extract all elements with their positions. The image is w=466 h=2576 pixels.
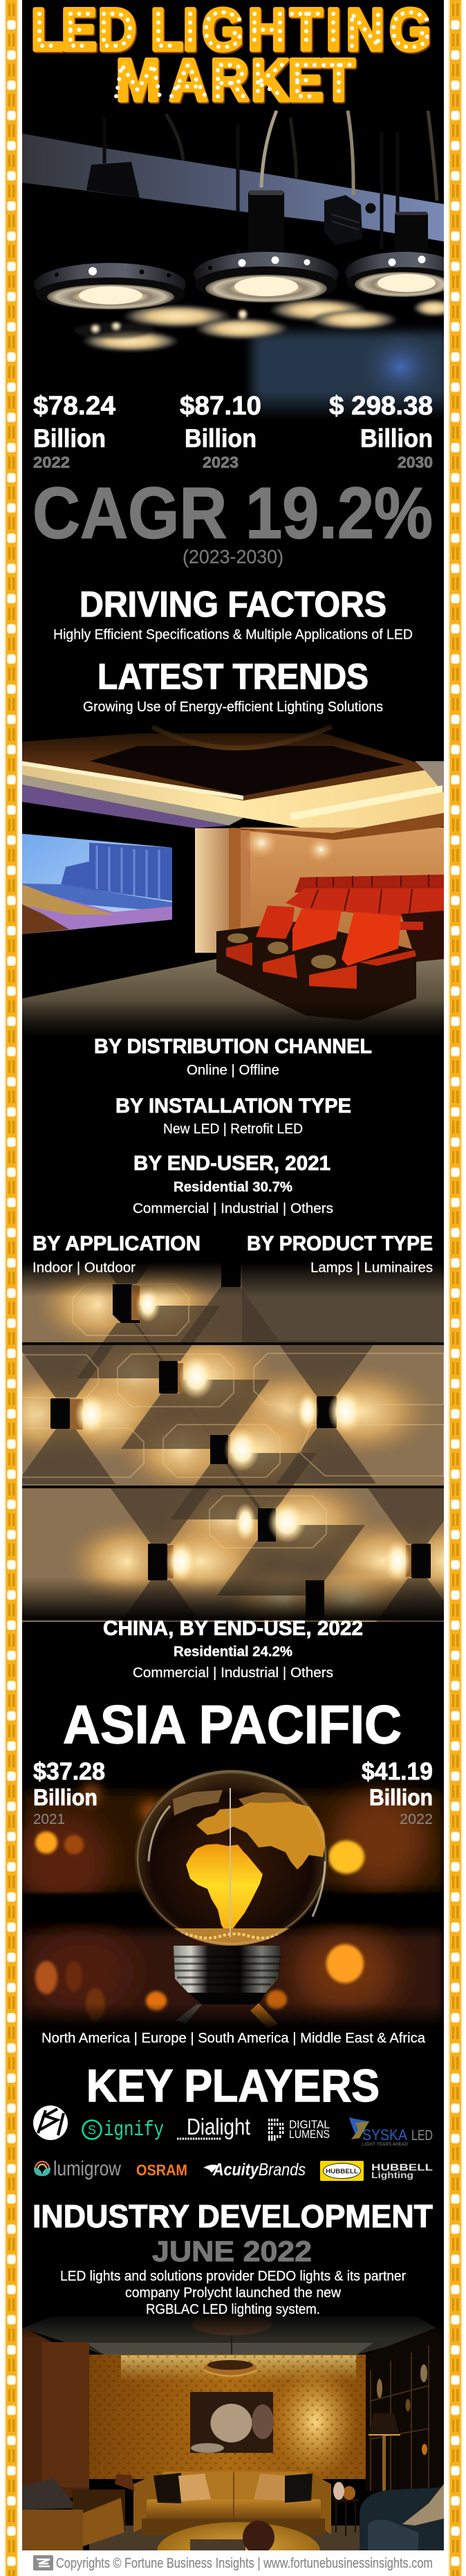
blurred blue background glow [252, 329, 449, 429]
development description [60, 2269, 406, 2317]
segment: by distribution channel [94, 1035, 372, 1078]
blurred background lamps [74, 299, 455, 351]
market value 2022: 2022 [33, 453, 70, 471]
logo: Hubbell Lighting wordmark [371, 2162, 434, 2180]
right shelves [366, 2325, 444, 2491]
photo: globe light bulb [14, 1746, 444, 2029]
lamp: centre [194, 252, 339, 302]
regional value 2022: $41.19 [362, 1758, 433, 1785]
regional value 2021: 2021 [33, 1811, 65, 1827]
development date: JUNE 2022 [152, 2235, 312, 2267]
development description: RGBLAC LED lighting system. [146, 2302, 320, 2317]
photo: LED pendant lamps [22, 111, 464, 433]
glass globe [135, 1770, 328, 1949]
market value 2022 [33, 392, 115, 471]
segment: by application: BY APPLICATION [32, 1232, 201, 1255]
development description: LED lights and solutions provider DEDO lights & its partner [60, 2269, 406, 2284]
segment: by end-user 2021: Commercial | Industrial | Others [133, 1201, 333, 1216]
logo: Syska LED: SYSKA [362, 2126, 407, 2144]
segment: China by end-use 2022: Residential 24.2% [174, 1645, 292, 1660]
heading: Asia Pacific: ASIA PACIFIC [63, 1694, 402, 1755]
wall lamp hoods [50, 1262, 431, 1618]
logo: Syska LED [349, 2117, 433, 2147]
black screen wall [22, 802, 178, 826]
lamp: left [34, 263, 186, 311]
key players logos [33, 2105, 434, 2181]
logo: Syska LED: LED [411, 2128, 433, 2144]
logo: Hubbell Lighting wordmark: HUBBELL [371, 2162, 434, 2173]
logo: Hubbell Lighting wordmark: Lighting [371, 2170, 413, 2180]
segment: China by end-use 2022: CHINA, BY END-USE, 2022 [103, 1617, 363, 1640]
logo: Digital Lumens: DIGITAL [289, 2119, 330, 2131]
logo: Signify: ignify [104, 2118, 164, 2142]
projection screen [22, 834, 172, 934]
floor lamp [369, 2413, 400, 2494]
photo: living room [22, 2314, 444, 2550]
panel grooves [22, 1342, 444, 1488]
marquee bulbs [39, 12, 427, 96]
regional value 2021 [33, 1758, 105, 1827]
market value 2022: Billion [33, 424, 106, 453]
logo: LSI ball [33, 2105, 68, 2140]
blue armchair [360, 2484, 444, 2550]
LED strip: right border [448, 0, 462, 2576]
regional value 2022 [362, 1758, 433, 1827]
market value 2023: $87.10 [180, 392, 261, 421]
segment: by end-user 2021 [133, 1152, 333, 1216]
LED strip: left border [4, 0, 18, 2576]
pillar [195, 828, 241, 956]
lamp: right [345, 252, 444, 298]
segment: by installation type: New LED | Retrofit LED [163, 1122, 303, 1137]
logo: lumigrow [34, 2157, 121, 2180]
segment: by installation type: BY INSTALLATION TYPE [115, 1095, 351, 1117]
heading: driving factors: DRIVING FACTORS [80, 585, 386, 625]
other regions list: North America | Europe | South America | Middle East & Africa [41, 2031, 426, 2046]
segment: by product type [247, 1232, 433, 1276]
segment: by product type: Lamps | Luminaires [310, 1261, 433, 1276]
heading: latest trends: LATEST TRENDS [97, 657, 369, 697]
logo: Acuity Brands: AcuityBrands [212, 2160, 306, 2180]
photo: wall lights [22, 1264, 444, 1622]
photo: home theater [22, 712, 444, 1046]
market value 2023: Billion [185, 424, 257, 453]
wall sconces [247, 829, 332, 860]
regional value 2022: 2022 [400, 1811, 433, 1827]
market value 2030 [329, 392, 433, 471]
heading: key players: KEY PLAYERS [86, 2060, 380, 2111]
floor [89, 2525, 360, 2550]
segment: by distribution channel: BY DISTRIBUTION CHANNEL [94, 1035, 372, 1058]
CAGR headline: CAGR 19.2% [32, 473, 433, 554]
title letters: MARKET [116, 48, 355, 113]
hood bronze sides [70, 1286, 411, 1578]
market value 2030: 2030 [398, 453, 433, 471]
shadow wedges [22, 1267, 444, 1622]
heading: industry development: INDUSTRY DEVELOPMENT [32, 2198, 433, 2234]
segment: by application: Indoor | Outdoor [32, 1261, 136, 1276]
bulb screw base [174, 1946, 281, 2029]
segment: China by end-use 2022: Commercial | Industrial | Others [133, 1665, 333, 1681]
segment: China by end-use 2022 [103, 1617, 363, 1681]
market value 2023 [180, 392, 261, 471]
segment: by application [32, 1232, 201, 1276]
logo: Fortune Business Insights [33, 2555, 53, 2570]
driving factors text: Highly Efficient Specifications & Multiple Applications of LED [53, 628, 413, 643]
back wall [89, 2355, 366, 2479]
title letters [31, 0, 431, 113]
market value 2022: $78.24 [33, 392, 115, 421]
title shadow: LED LIGHTING [32, 0, 432, 64]
title shadow: MARKET [118, 49, 356, 115]
segment: by end-user 2021: Residential 30.7% [174, 1180, 292, 1195]
regional value 2021: Billion [33, 1784, 97, 1810]
ceiling [22, 727, 444, 833]
title: LED Lighting Market [31, 0, 432, 115]
logo: Hubbell badge [320, 2161, 364, 2181]
logo: Digital Lumens [268, 2119, 330, 2141]
segment: by installation type [115, 1095, 351, 1137]
left armchair [22, 2478, 125, 2551]
left wall [22, 2327, 89, 2498]
logo: Signify [83, 2118, 164, 2142]
side table [332, 2482, 360, 2536]
rear seating rows [286, 875, 444, 962]
painting [190, 2392, 274, 2453]
segment: by product type: BY PRODUCT TYPE [247, 1232, 433, 1255]
logo: OSRAM: OSRAM [136, 2162, 187, 2179]
segment: by end-user 2021: BY END-USER, 2021 [133, 1152, 330, 1175]
ring pendant lamp [204, 2360, 257, 2376]
back wall [241, 828, 444, 949]
market value 2030: $ 298.38 [329, 392, 433, 421]
market value 2023: 2023 [203, 453, 239, 471]
logo: Hubbell badge: HUBBELL [326, 2168, 358, 2175]
light hot spots [75, 1286, 411, 1582]
logo: Dialight: Dialight [187, 2114, 250, 2139]
logo: Signify: S [88, 2123, 96, 2137]
blurred bokeh background [14, 1782, 444, 2025]
regional value 2022: Billion [369, 1784, 433, 1810]
globe continents [173, 1790, 325, 1936]
latest trends text: Growing Use of Energy-efficient Lighting Solutions [83, 700, 383, 715]
development description: company Prolycht launched the new [125, 2285, 342, 2301]
logo: lumigrow: lumigrow [53, 2157, 121, 2180]
gold coffee table [157, 2521, 320, 2576]
CAGR period: (2023-2030) [183, 546, 283, 567]
title shadow [32, 0, 432, 115]
floor [22, 959, 444, 1032]
logo: Syska LED: LIGHT YEARS AHEAD [362, 2141, 408, 2147]
sofa [115, 2472, 331, 2535]
light glows [22, 1272, 444, 1622]
logo: Digital Lumens: LUMENS [289, 2128, 330, 2141]
regional value 2021: $37.28 [33, 1758, 105, 1785]
front chairs [216, 906, 416, 1021]
ceiling [24, 2314, 436, 2355]
segment: by distribution channel: Online | Offline [187, 1063, 279, 1078]
octagon panel outlines [22, 1284, 444, 1548]
market value 2030: Billion [360, 424, 433, 453]
